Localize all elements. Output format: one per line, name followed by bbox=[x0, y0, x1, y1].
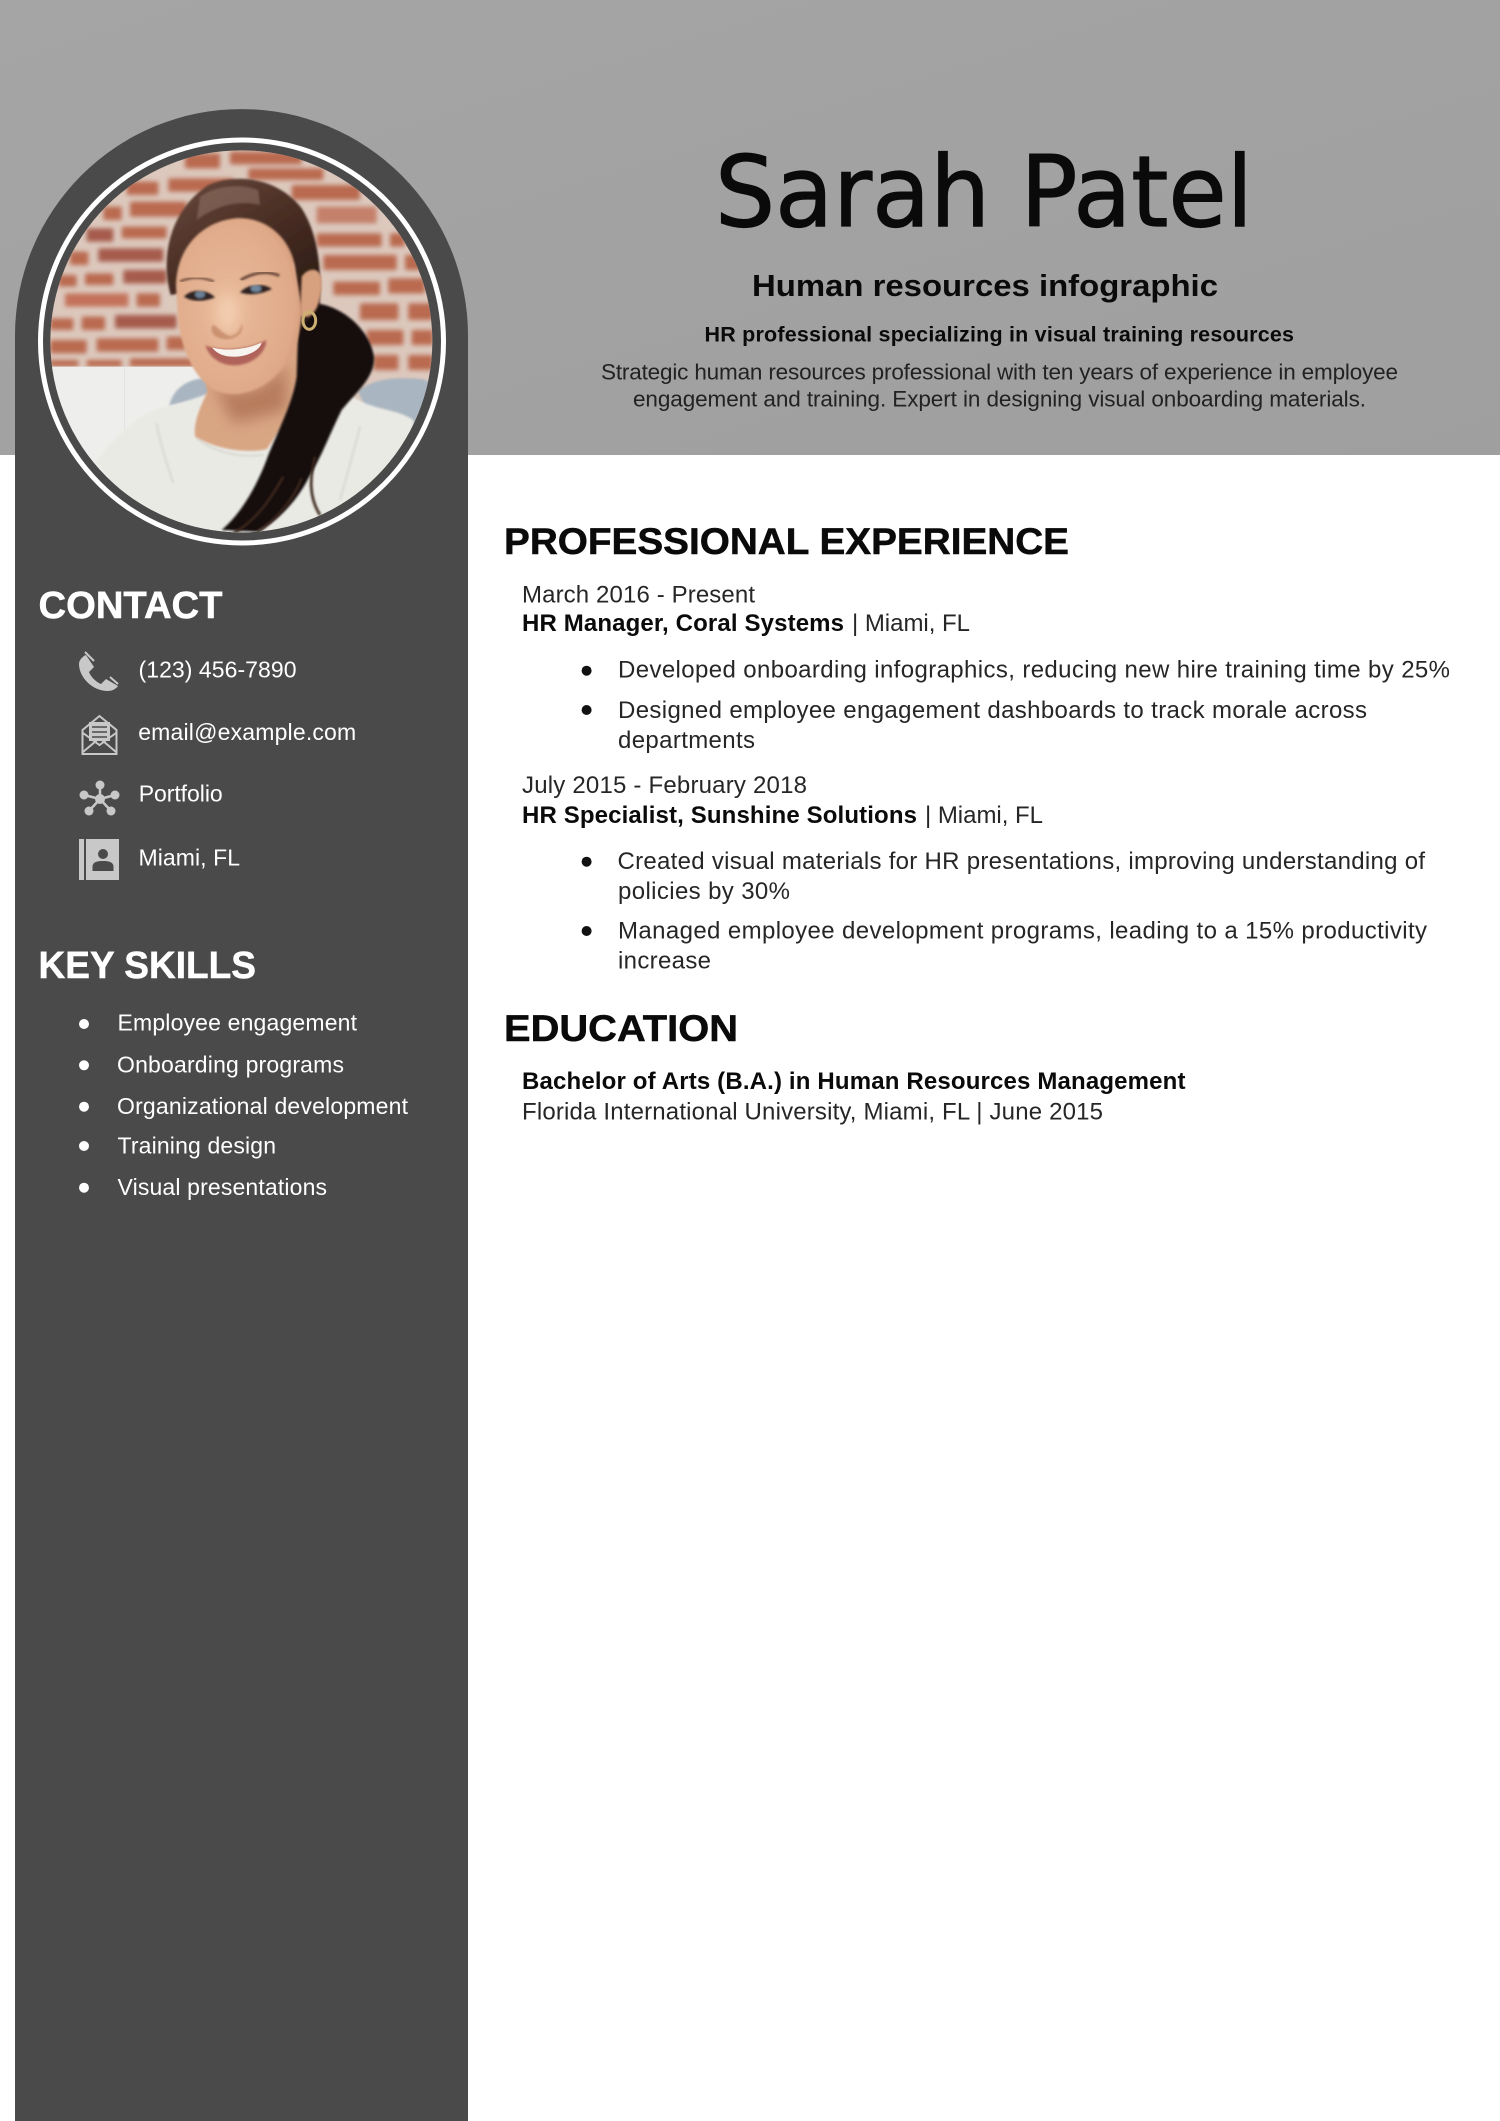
heading: professional experience: PROFESSIONAL EXPERIENCE bbox=[504, 521, 1069, 562]
summary bbox=[601, 360, 1398, 411]
shirt folds bbox=[157, 423, 360, 500]
job dates: July 2015 - February 2018 bbox=[522, 772, 807, 799]
shirt bbox=[95, 393, 414, 537]
education entry bbox=[522, 1068, 1186, 1125]
bullet list: Created visual materials for HR presentations, improving understanding of bbox=[618, 848, 1425, 875]
bullet list bbox=[582, 848, 1427, 974]
bullet list: departments bbox=[618, 727, 755, 754]
eyebrows bbox=[180, 278, 214, 282]
icon: phone bbox=[79, 652, 118, 691]
bullet list: Designed employee engagement dashboards to track morale across bbox=[618, 697, 1367, 724]
neck shadow bbox=[213, 363, 287, 423]
job location: | Miami, FL bbox=[925, 802, 1043, 829]
nose shadow bbox=[212, 323, 242, 339]
job title: HR Manager, Coral Systems bbox=[522, 610, 844, 637]
sidebar panel bbox=[15, 109, 468, 2121]
degree: Bachelor of Arts (B.A.) in Human Resources Management bbox=[522, 1068, 1186, 1095]
photo ring bbox=[40, 140, 444, 543]
armchair bbox=[169, 378, 433, 427]
earring bbox=[303, 312, 316, 329]
bullet list: Developed onboarding infographics, reducing new hire training time by 25% bbox=[618, 656, 1450, 684]
name title: Sarah Patel bbox=[715, 136, 1253, 250]
key skills list: Onboarding programs bbox=[117, 1051, 344, 1077]
bullet list bbox=[582, 656, 1450, 754]
subtitle: Human resources infographic bbox=[752, 268, 1218, 303]
hair strands bbox=[233, 457, 320, 535]
school: Florida International University, Miami, FL | June 2015 bbox=[522, 1098, 1103, 1125]
face bbox=[176, 218, 302, 394]
job: HR Specialist bbox=[522, 772, 1427, 974]
key skills list: Training design bbox=[118, 1132, 276, 1158]
job dates: March 2016 - Present bbox=[522, 582, 755, 609]
text: email: email@example.com bbox=[138, 719, 356, 745]
text: portfolio: Portfolio bbox=[139, 781, 223, 807]
bullet list: policies by 30% bbox=[618, 878, 790, 905]
tagline: HR professional specializing in visual training resources bbox=[704, 323, 1294, 347]
heading: contact: CONTACT bbox=[38, 585, 222, 627]
white wall bbox=[47, 367, 267, 537]
nose highlight bbox=[217, 293, 238, 333]
neck and chest bbox=[195, 323, 300, 451]
ponytail bbox=[222, 303, 374, 532]
text: location: Miami, FL bbox=[138, 845, 240, 871]
icon: email bbox=[82, 716, 116, 754]
eyes bbox=[184, 285, 272, 301]
profile photo bbox=[40, 140, 444, 543]
key skills list bbox=[79, 1010, 409, 1200]
heading: key skills: KEY SKILLS bbox=[38, 945, 256, 987]
key skills list: Visual presentations bbox=[118, 1174, 327, 1200]
ear bbox=[300, 270, 322, 317]
heading: education: EDUCATION bbox=[504, 1008, 738, 1049]
job location: | Miami, FL bbox=[852, 610, 970, 637]
contact list bbox=[79, 652, 356, 880]
smile bbox=[205, 340, 266, 365]
bullet list: increase bbox=[618, 948, 711, 974]
icon: address book bbox=[79, 839, 119, 880]
job title: HR Specialist, Sunshine Solutions bbox=[522, 802, 917, 829]
header band bbox=[0, 0, 1500, 455]
hair top bbox=[167, 179, 320, 330]
portrait illustration bbox=[47, 147, 440, 537]
summary: engagement and training. Expert in designing visual onboarding materials. bbox=[633, 386, 1366, 411]
bullet list: Managed employee development programs, leading to a 15% productivity bbox=[618, 918, 1427, 944]
icon: portfolio network bbox=[80, 780, 120, 816]
summary: Strategic human resources professional with ten years of experience in employee bbox=[601, 360, 1398, 384]
key skills list: Organizational development bbox=[117, 1093, 409, 1119]
job: HR Manager bbox=[522, 582, 1450, 754]
key skills list: Employee engagement bbox=[118, 1010, 358, 1036]
text: phone: (123) 456-7890 bbox=[138, 656, 296, 682]
